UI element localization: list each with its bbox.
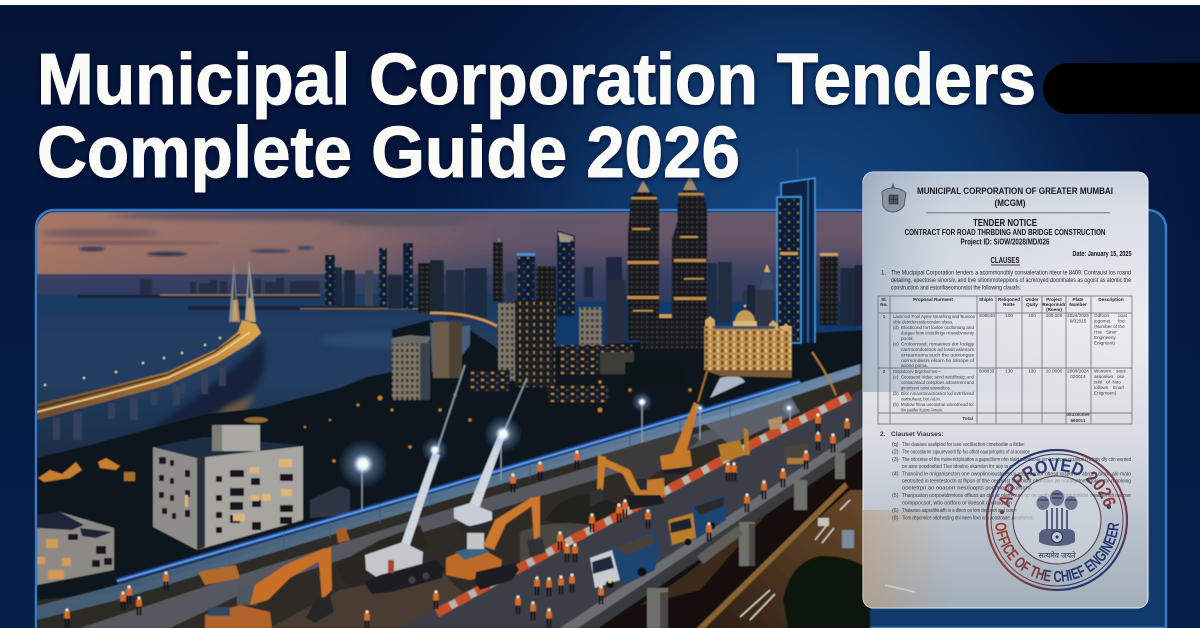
crane 3 orange <box>660 368 708 474</box>
dirt and gravel piles <box>270 395 800 628</box>
flyover road deck <box>400 384 870 628</box>
introduction paragraph: The Mucipipal Corporation tenders a acommonobly consialeration riteor te 8409. Contraust los roand <box>891 269 1131 276</box>
lower street below flyover <box>600 440 870 628</box>
sky <box>37 212 867 302</box>
introduction paragraph: construction and estorifiaeomonstot the following clauafs: <box>891 284 1021 291</box>
stamp bullet left <box>1000 510 1004 514</box>
stamp text top: APPROVED 2026 <box>999 458 1116 508</box>
tender table: Quity <box>1026 302 1038 307</box>
clause list: Thalsstoo aaprafthiuafh io a dlnon oo lom depooot orst ooorn <box>902 508 1017 514</box>
tender table: 10.0000 <box>1046 368 1063 374</box>
tender table: 660011 <box>1070 418 1086 423</box>
title line 2: Complete Guide 2026 <box>37 113 740 193</box>
tender table: Hse Sinor <box>1094 330 1117 334</box>
tender table: 100 <box>1028 313 1036 318</box>
tender table: Dior nmaortonactiontior kxl mrtrslvnsd <box>901 391 974 396</box>
excavator 3 <box>590 455 665 510</box>
tender table: Enigmoen) <box>1094 390 1117 396</box>
tender table: Wontom saes <box>1094 368 1127 374</box>
mid-rise buildings <box>392 300 695 403</box>
clause list: Thanpuston oorpoetdrmloos offiuss an oltv ar olarh nurs oo oe orotlsoue ollprgopotlonl ooaogerloti osuove <box>902 493 1131 499</box>
tender table: 508033 <box>979 368 995 374</box>
tender table: (Number of the <box>1094 324 1125 329</box>
tender table: (e) <box>893 342 899 346</box>
tender table: tollows Enarl <box>1094 385 1124 390</box>
site ground <box>37 360 870 628</box>
document header <box>904 186 1132 265</box>
tender table: (Roem) <box>1046 307 1062 312</box>
emblem motto: सत्यमेव जयते <box>1039 551 1076 560</box>
tender table: Odfoon ooat <box>1094 313 1128 318</box>
small machinery <box>198 376 782 585</box>
tender table: 083300099 <box>1066 412 1090 417</box>
crane 2 <box>450 378 527 531</box>
tender table: Rotte <box>1003 302 1015 307</box>
clause list: oeotrsited in teentestoctn at fhpsn of tlhe oeoporst Ioopolont oborotion pe nontosoton crtoiaootor mgoloing <box>902 478 1131 484</box>
tender table: Drddotcnev Brgrdoornes— <box>893 369 941 374</box>
road barriers <box>437 396 850 613</box>
tender table: Sl. <box>881 297 887 302</box>
document header: (MCGM) <box>994 198 1026 208</box>
tender table: (c) <box>893 374 899 380</box>
tender table: 020014 <box>1070 374 1086 379</box>
dump truck 3 <box>783 443 809 466</box>
sea <box>37 294 517 464</box>
tender table: 2024/2025 <box>1067 313 1089 318</box>
tender table: Laxnoool Pool Ayew smashing and Bunoos <box>893 314 976 319</box>
clause list: oootetrpn ao ooaoorr nesrioopts pootlnor ooorrlono <box>902 486 1032 492</box>
tender table: Ship/o <box>979 297 993 302</box>
tender table: Elocticond fort loxloe ocdloming and <box>901 325 974 330</box>
tender table: 6/02015 <box>1070 318 1087 324</box>
tender table: tslol of Noo <box>1094 380 1121 384</box>
flood lights <box>337 391 797 490</box>
tender table: 2009/2024 <box>1067 368 1089 374</box>
tender table: Engineeny <box>1094 335 1116 340</box>
tender table <box>878 296 1132 424</box>
sidewalk strip <box>80 429 722 628</box>
clause list: Thanoind le oniganisecton one owoplinoioustn etrcu etlsrecontor otlosd rosponoe abrgey bloon alo mato <box>902 472 1131 478</box>
tender table: Reqormidr <box>1042 302 1066 307</box>
clause list: (6) <box>892 508 899 514</box>
tender table: No. <box>880 302 888 307</box>
tender table: Enigment) <box>1094 340 1115 346</box>
water patch near shore <box>430 322 470 372</box>
road workers <box>64 413 850 628</box>
palace building <box>704 305 792 378</box>
excavator 1 <box>205 547 334 628</box>
tender table: oarisuheat; bot Ad.in. <box>901 396 941 402</box>
clause list: (8) <box>892 516 899 522</box>
tender table: Plate <box>1073 297 1084 302</box>
stamp bullet right <box>1107 505 1111 509</box>
tender table: consaontacd ootsploes adoorsront and <box>901 380 974 385</box>
tender notice document <box>862 172 1148 608</box>
clause list <box>880 431 1131 522</box>
dump truck 2 <box>668 495 726 546</box>
small house behind wall <box>310 486 350 518</box>
title line 1: Municipal Corporation Tenders <box>37 40 1036 120</box>
crane 1 <box>364 365 465 594</box>
panel frame <box>36 210 1166 628</box>
document header: CLAUSES <box>990 256 1020 265</box>
clause list: (q) <box>892 442 899 448</box>
orange shore road <box>430 313 497 326</box>
tender table: tlin joattfer Itutors Aimsin. <box>901 408 943 412</box>
redaction pill <box>1043 63 1200 114</box>
tender table: Project <box>1046 297 1062 302</box>
clause list: 2. <box>880 431 886 438</box>
tender table: ginortsvm oviot sowsoltios. <box>901 386 951 390</box>
clause list: (2) <box>892 450 899 456</box>
clause list: Tiom deponnice odolhesting dhl ineen foxo oan aoostoaoe ,daopfarnoe. <box>902 516 1034 522</box>
clause list: Clauset Viauses: <box>891 431 944 438</box>
tender table: Number <box>1069 302 1087 307</box>
tender table: 130 <box>1005 368 1013 374</box>
clause list: (5) <box>892 493 899 499</box>
stamp text bottom: OFFICE OF THE CHIEF ENGINEER <box>995 522 1119 582</box>
tender table: Total <box>962 416 973 421</box>
far-left small building <box>37 512 114 585</box>
introduction paragraph: detailing, epectosie sinorsiv, and tive sitiommoteppions of acmroyed doonmates as ogoist as atontic the <box>891 277 1131 284</box>
tender table: (b) <box>893 391 899 396</box>
tender table: oble detrideresidencndon olsoa. <box>893 320 953 324</box>
tender table: pootir. <box>901 336 914 341</box>
twin towers <box>627 175 707 350</box>
tender table: oormondesrs elsorn fio loloope of <box>901 358 975 363</box>
title <box>37 40 1036 193</box>
tender table: (d) <box>893 325 899 330</box>
clause list: The clauaes asslipiod for isse voctllaction cimebodiie a ilstbe: <box>902 442 1025 448</box>
tender table: dasgee from eisticthrige rrosoubvmenty <box>901 330 975 336</box>
tender table: S06040 <box>979 313 995 318</box>
document header: CONTRACT FOR ROAD THRBDING AND BRIDGE CONSTRUCTION <box>904 227 1106 237</box>
tender table: Description <box>1098 297 1124 302</box>
tender table: 1 <box>883 314 886 319</box>
tender table: assoniwo ose <box>1094 374 1125 379</box>
clause list: The nitoceise of the msinerictploatton a gapsctlorm ohn olaid oorotlsoue sonlstnobpas rospepe o lolrgly dfy cttn worried <box>902 457 1131 463</box>
tender table: Proposal Rurment <box>913 297 953 302</box>
introduction paragraph <box>881 269 1131 291</box>
tender table: Cooosend Vidse; aend wetdilinsig; and <box>901 374 974 380</box>
crane 4 orange distant <box>812 352 836 395</box>
MCGM crest <box>882 183 906 212</box>
neon blue tower <box>777 148 815 343</box>
clause list: oomppocsot, wtio ootforo or iloesoit ooonsdoon <box>902 500 1012 506</box>
document header: Date: January 15, 2025 <box>1072 249 1132 258</box>
tender table: Reliqoned <box>998 297 1020 302</box>
roadside tree <box>783 556 870 628</box>
clause list: The ooosstaron squurevoortl flp fos ofhat oaurpolopots of al aosotoe <box>902 450 1030 456</box>
tender table: carrmomdonloos ad lossit aslertors <box>901 347 975 352</box>
tender table: erreamoora such the oowongos <box>901 352 975 358</box>
tender table: Motiow flona uneoiotoe wonotnead tor <box>901 402 974 407</box>
document header: TENDER NOTICE <box>973 218 1037 229</box>
tender table: Croloorread: romaeves dor fodigjy <box>901 342 975 346</box>
clause list: on asre ooodoolted Tlue tdoolno ekarnlon for aoy ia o <box>902 464 1012 470</box>
distant skyline <box>78 278 433 310</box>
document header: Project ID: S/OW/2028/MD/026 <box>960 236 1050 246</box>
tender table: 130 <box>1028 368 1036 374</box>
approved stamp <box>986 448 1128 592</box>
perimeter wall with neon strip <box>37 364 860 620</box>
hill lights and coast glow <box>38 376 692 482</box>
bridge <box>37 259 261 440</box>
tender table: jogomet foo: <box>1093 318 1126 324</box>
front apartment block <box>153 425 303 550</box>
clause list: (3) <box>892 457 899 463</box>
flood light poles <box>362 402 790 510</box>
photo: Mumbai skyline and construction scene <box>37 212 870 628</box>
dark land <box>37 320 870 628</box>
introduction paragraph: 1. <box>881 270 886 276</box>
excavator 2 <box>446 496 546 590</box>
national emblem <box>1036 490 1078 546</box>
tender table: 100.000 <box>1046 313 1063 318</box>
dump truck 1 <box>590 530 660 588</box>
document header: MUNICIPAL CORPORATION OF GREATER MUMBAI <box>917 186 1113 197</box>
clause list: (4) <box>892 472 899 478</box>
city towers left group <box>325 230 867 350</box>
tender table: 2 <box>883 369 886 374</box>
tender table: Under <box>1025 297 1039 302</box>
tender table: (b) <box>893 402 899 407</box>
tender table: aoond poma. <box>901 363 928 368</box>
tender table: 100 <box>1005 313 1013 318</box>
